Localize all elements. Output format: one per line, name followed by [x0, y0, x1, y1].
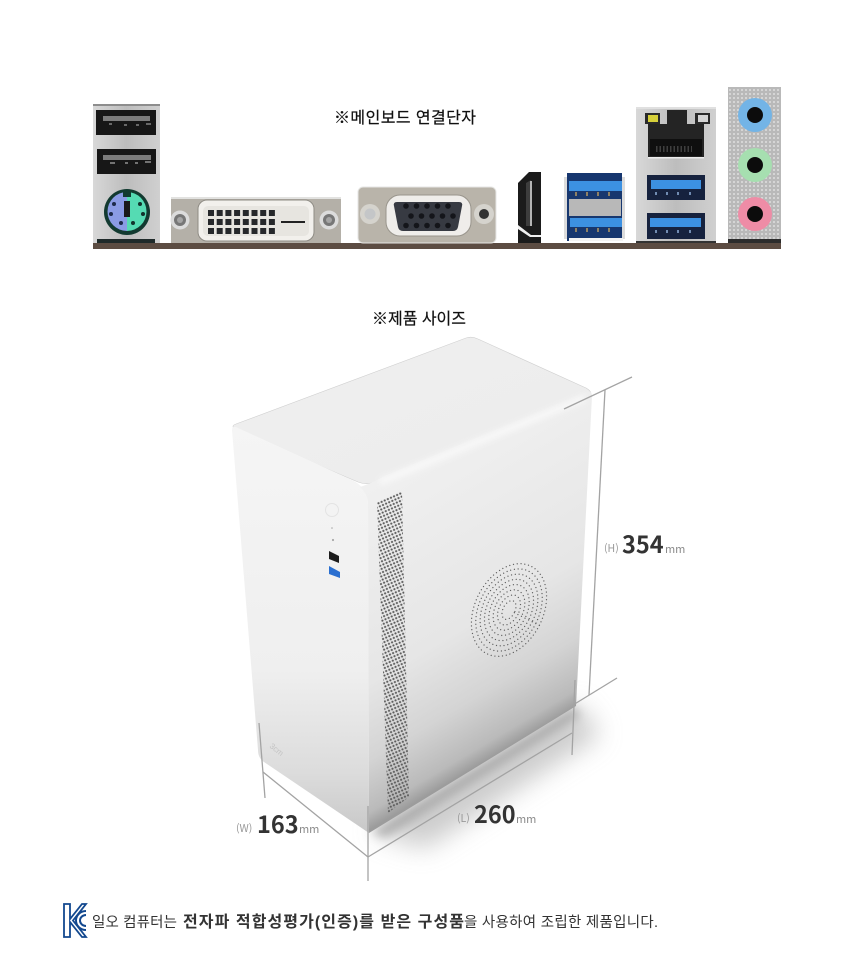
connector panel	[93, 87, 781, 249]
dimension: length: (L)	[457, 811, 470, 826]
case side face	[360, 392, 592, 833]
icon: KC mark	[64, 904, 86, 937]
heading: motherboard connectors: ※메인보드 연결단자	[334, 109, 476, 127]
certification note: 전자파 적합성평가(인증)를 받은 구성품	[183, 913, 464, 931]
tight floor shadow	[370, 706, 580, 838]
side highlight	[380, 398, 585, 482]
bottom rail	[93, 243, 781, 249]
certification note	[92, 913, 658, 931]
dimension: length: 260	[474, 796, 516, 830]
dimension: height: mm	[665, 541, 685, 557]
connector: VGA	[358, 187, 496, 243]
connector: DVI	[170, 197, 341, 243]
wide floor shadow	[372, 704, 600, 848]
dimension: width	[236, 723, 368, 881]
connector: USB 2.0 and PS/2	[93, 104, 160, 243]
indicator lights	[331, 527, 334, 541]
certification note: 을 사용하여 조립한 제품입니다.	[464, 914, 658, 931]
fan perforation	[456, 551, 562, 669]
power button	[326, 504, 338, 516]
front USB black	[329, 551, 339, 563]
dimension: length: mm	[516, 811, 536, 827]
certification note: 일오 컴퓨터는	[92, 914, 177, 931]
dimension: width: mm	[299, 821, 319, 837]
case top face	[233, 337, 591, 484]
brand mark: 3cm	[268, 741, 285, 758]
case front face	[232, 427, 369, 833]
dimension: height	[564, 377, 685, 705]
dimension: width: (W)	[236, 821, 252, 836]
connector: HDMI	[518, 172, 541, 243]
front USB blue	[329, 566, 340, 578]
heading: product size: ※제품 사이즈	[372, 310, 466, 328]
vent slot	[377, 491, 409, 813]
dimension: width: 163	[257, 806, 299, 840]
connector: double USB 3.0	[564, 173, 625, 241]
dimension: height: (H)	[604, 541, 619, 556]
dimension: length	[368, 680, 575, 857]
dimension: height: 354	[622, 526, 664, 560]
product: computer case	[232, 337, 600, 848]
connector: audio jacks	[728, 87, 781, 243]
connector: LAN and USB 3.0	[636, 107, 716, 243]
